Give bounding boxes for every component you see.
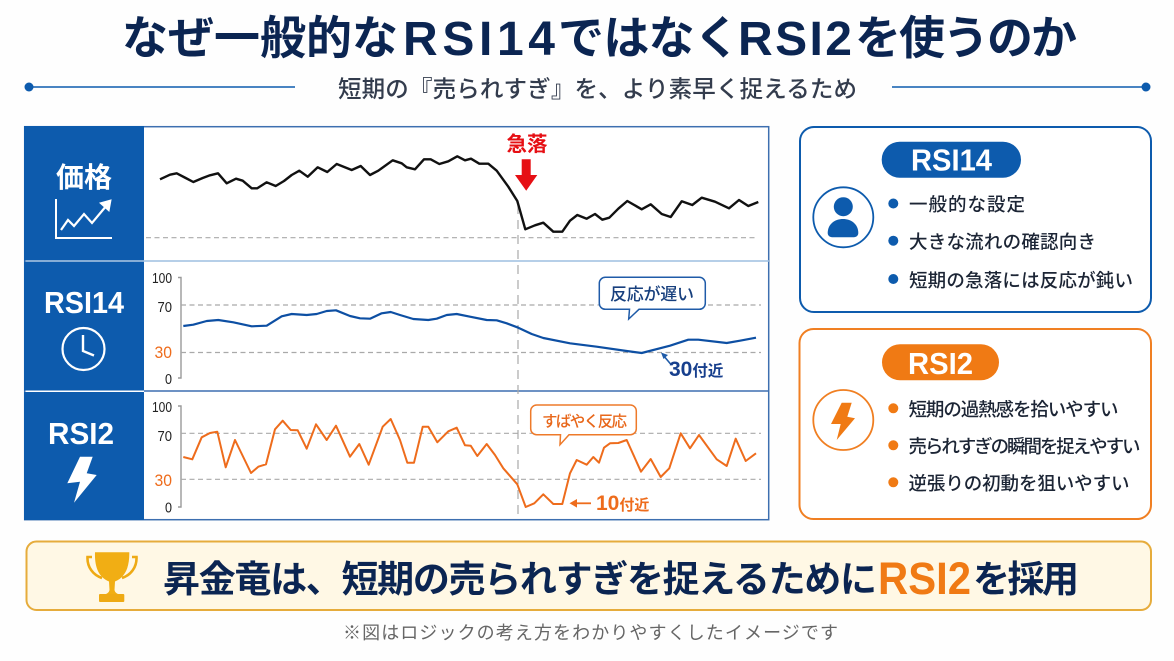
callout: sudden drop: 急落: [506, 133, 548, 156]
icon: rising chart: [56, 199, 112, 238]
RSI14 axis labels: 30: [154, 343, 172, 362]
banner: conclusion: [26, 542, 1151, 610]
icon: lightning circle: [813, 390, 873, 450]
title: なぜ一般的な: [122, 12, 398, 64]
callout: quick reaction: [531, 405, 636, 445]
panel: RSI2 summary: [800, 329, 1151, 519]
panel: price label: [24, 126, 144, 260]
annotation: near 10: 10付近: [596, 492, 649, 515]
footnote: ※図はロジックの考え方をわかりやすくしたイメージです: [343, 623, 838, 643]
panel: RSI14 label: [24, 262, 144, 390]
subtitle: [24, 76, 1150, 102]
callout: quick reaction: すばやく反応: [542, 412, 627, 430]
RSI2 axis labels: 100: [152, 400, 172, 416]
subtitle: 短期の『売られすぎ』を、より素早く捉えるため: [338, 76, 857, 102]
chart: price line: [146, 156, 758, 238]
RSI14 axis labels: 70: [158, 300, 172, 316]
RSI2 axis labels: 30: [154, 471, 172, 490]
bullet list: RSI14: [888, 194, 1133, 291]
badge: RSI2: [882, 344, 999, 381]
panel: chart comparison: [24, 126, 769, 520]
RSI14 line: [183, 310, 756, 353]
RSI2 line: [183, 419, 756, 507]
banner text: [163, 553, 1079, 604]
callout: slow reaction: [599, 277, 705, 319]
annotation: near 30: [661, 352, 724, 381]
RSI14 label text: RSI14: [44, 285, 125, 320]
bullet list: RSI2: [888, 399, 1140, 494]
RSI2 axis labels: 70: [158, 429, 172, 445]
icon: person: [813, 187, 873, 247]
icon: lightning: [67, 457, 97, 503]
badge: RSI14: RSI14: [911, 142, 993, 178]
bullet list: RSI2: 売られすぎの瞬間を捉えやすい: [908, 436, 1140, 457]
icon: trophy: [87, 552, 137, 602]
annotation: near 10: [570, 492, 649, 515]
bullet list: RSI14: 一般的な設定: [909, 194, 1025, 215]
arrow: sudden drop: [515, 159, 537, 191]
badge: RSI2: RSI2: [908, 346, 973, 381]
banner text: 昇金竜は、短期の売られすぎを捉えるために: [163, 559, 877, 600]
title: [122, 12, 1077, 66]
banner text: RSI2: [878, 553, 971, 604]
panel: RSI14 summary: [800, 127, 1151, 312]
RSI2 label text: RSI2: [48, 416, 114, 451]
bullet list: RSI14: 大きな流れの確認向き: [909, 232, 1096, 252]
title: RSI14: [403, 13, 555, 66]
badge: RSI14: [882, 142, 1021, 178]
banner text: を採用: [973, 559, 1079, 600]
bullet list: RSI14: 短期の急落には反応が鈍い: [909, 270, 1133, 291]
RSI14 axis labels: 0: [165, 372, 172, 388]
title: RSI2: [738, 13, 852, 66]
callout: slow reaction: 反応が遅い: [610, 284, 694, 304]
chart: RSI14: [152, 271, 761, 388]
bullet list: RSI2: 短期の過熱感を拾いやすい: [908, 399, 1118, 420]
RSI14 axis labels: [152, 271, 172, 388]
title: を使うのか: [855, 12, 1077, 64]
panel: RSI2 label: [24, 392, 144, 520]
RSI2 axis labels: 0: [165, 500, 172, 516]
bullet list: RSI2: 逆張りの初動を狙いやすい: [908, 473, 1130, 494]
price label text: 価格: [56, 162, 112, 193]
title: ではなく: [558, 12, 740, 64]
icon: clock: [62, 328, 104, 370]
annotation: near 30: 30付近: [669, 358, 724, 381]
RSI14 axis labels: 100: [152, 271, 172, 287]
chart: RSI2: [152, 400, 761, 516]
RSI2 axis labels: [152, 400, 172, 516]
callout: sudden drop: [506, 133, 548, 191]
